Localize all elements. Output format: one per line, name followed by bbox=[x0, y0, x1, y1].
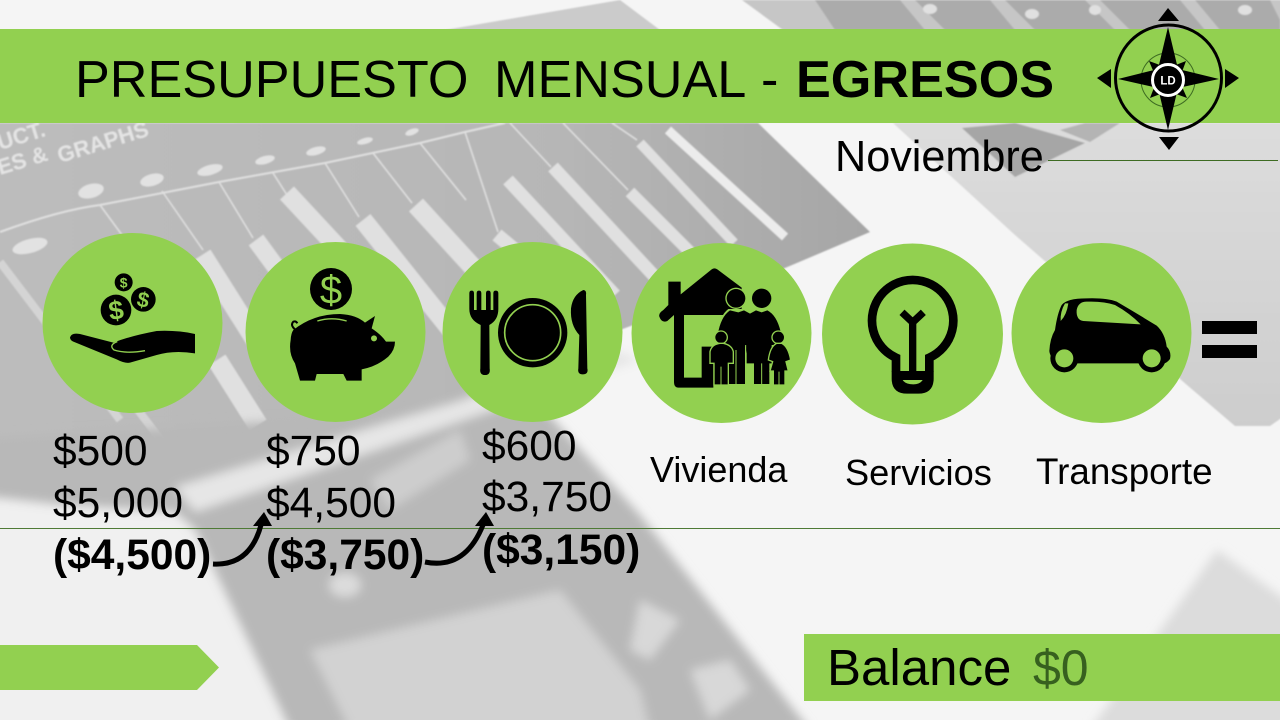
panel: balance: Balance bbox=[827, 639, 1011, 696]
title: EGRESOS bbox=[796, 51, 1054, 109]
figures: column 3: $600 bbox=[482, 423, 577, 470]
figures: column 2: ($3,750) bbox=[266, 532, 424, 579]
arrow: first carry-over bbox=[213, 512, 272, 564]
icon: hand with coins bbox=[70, 273, 195, 363]
icon: plate and cutlery bbox=[469, 290, 588, 375]
icon: hand with coins: $ bbox=[107, 294, 126, 326]
icon: piggy bank with coin: $ bbox=[320, 268, 342, 312]
figures: column 1: $5,000 bbox=[53, 480, 183, 527]
icon: compass logo: LD bbox=[1160, 76, 1176, 88]
figures: column 1 bbox=[53, 428, 211, 579]
panel: balance: $0 bbox=[1033, 640, 1089, 696]
icon: hand with coins: $ bbox=[120, 274, 128, 290]
panel: green icon circles bbox=[42, 233, 1192, 424]
label: Vivienda: Vivienda bbox=[650, 449, 788, 490]
title: MENSUAL bbox=[494, 51, 746, 109]
panel: balance bbox=[804, 634, 1280, 701]
figures: column 2: $750 bbox=[266, 428, 361, 475]
figures: column 2 bbox=[266, 428, 424, 579]
icon: hand with coins: $ bbox=[135, 287, 152, 313]
header banner bbox=[0, 29, 1280, 123]
icon: light bulb bbox=[872, 280, 953, 394]
icon: piggy bank with coin bbox=[290, 268, 395, 381]
month rule bbox=[1048, 160, 1278, 161]
background photo: laptop and financial chart: GRAPHS bbox=[54, 116, 151, 168]
icon: car bbox=[1049, 298, 1170, 372]
arrow: second carry-over bbox=[425, 512, 494, 563]
figures: column 2: $4,500 bbox=[266, 480, 396, 527]
figures: column 1: ($4,500) bbox=[53, 532, 211, 579]
figures: column 3: $3,750 bbox=[482, 474, 612, 521]
figures: column 3 bbox=[482, 423, 640, 574]
figures: column 3: ($3,150) bbox=[482, 527, 640, 574]
title: PRESUPUESTO bbox=[75, 51, 468, 109]
label: Servicios: Servicios bbox=[845, 452, 992, 493]
decorative arrow banner bbox=[0, 645, 219, 690]
icon: house with family bbox=[659, 268, 791, 388]
month label: Noviembre bbox=[835, 133, 1044, 181]
title: - bbox=[761, 51, 778, 109]
figures: column 1: $500 bbox=[53, 428, 148, 475]
label: Transporte: Transporte bbox=[1036, 451, 1213, 492]
equals sign bbox=[1202, 321, 1257, 358]
divider line bbox=[0, 528, 1280, 529]
icon: compass logo bbox=[1097, 8, 1239, 150]
